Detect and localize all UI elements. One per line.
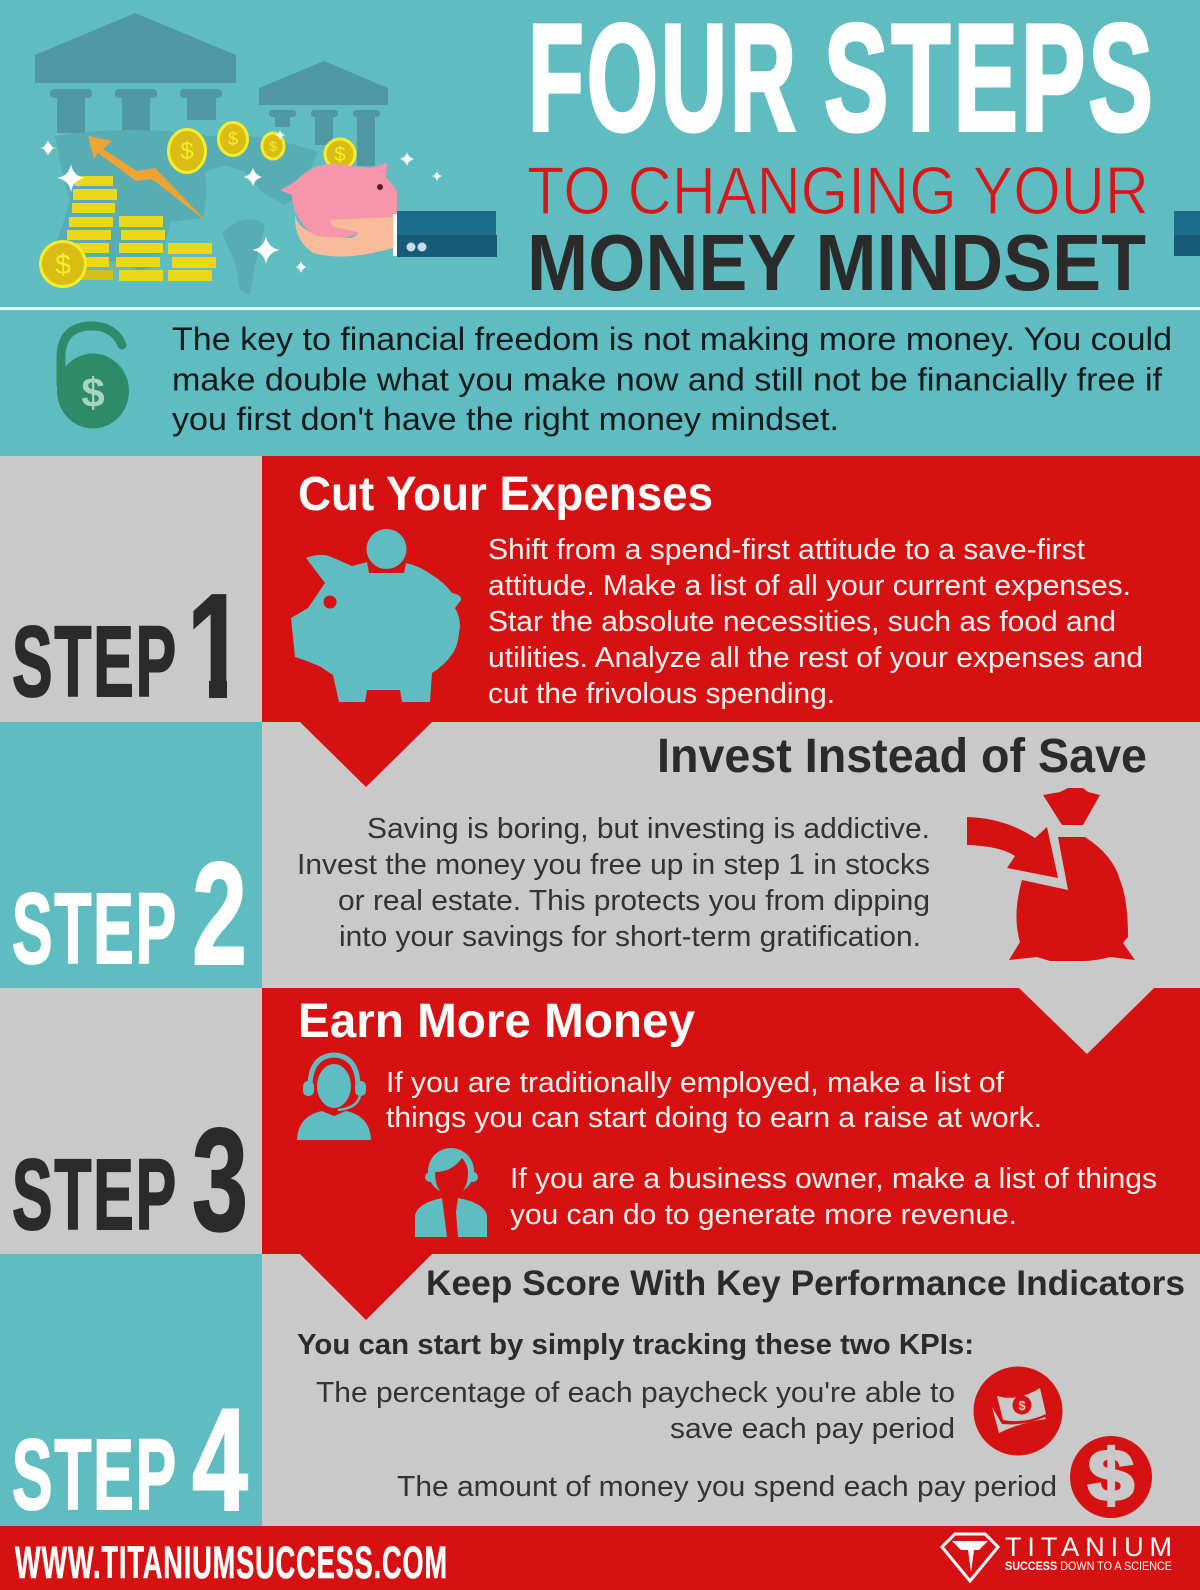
- step 4 label: [12, 1378, 248, 1541]
- icon: coins: [40, 122, 355, 286]
- step 3 text: business owner: [510, 1163, 1157, 1231]
- logo wordmark: TITANIUM: [1005, 1532, 1172, 1562]
- icon: pink piggy bank: [280, 163, 397, 238]
- panel: intro: [57, 321, 1172, 437]
- step 3 label: STEP: [12, 1139, 178, 1251]
- step 2 label: STEP: [12, 873, 178, 985]
- kpi 1 text: [316, 1377, 955, 1445]
- panel: step 1: [0, 456, 1200, 729]
- step 3 heading: Earn More Money: [298, 995, 695, 1048]
- divider line: [0, 307, 1200, 310]
- intro text: you first don't have the right money mindset.: [172, 401, 839, 437]
- step 2 label: 2: [192, 832, 247, 995]
- icon: piggy bank: [291, 529, 461, 702]
- sparkles: [39, 130, 442, 273]
- title line: money mindset: MONEY MINDSET: [527, 218, 1146, 307]
- icon: sleeve: [397, 211, 497, 257]
- step 2 body text: [297, 813, 930, 953]
- step 4 heading: Keep Score With Key Performance Indicators: [426, 1264, 1185, 1303]
- step 1 label: 1: [187, 564, 245, 729]
- step 1 heading: Cut Your Expenses: [298, 468, 713, 521]
- icon: open lock with dollar: $: [81, 369, 105, 416]
- step 1 body text: [488, 534, 1143, 710]
- coin symbols: $: [55, 249, 71, 280]
- panel: footer: [0, 1526, 1200, 1590]
- step 4 label: STEP: [12, 1419, 178, 1531]
- logo wordmark: SUCCESS DOWN TO A SCIENCE: [1005, 1561, 1172, 1573]
- step 1 body text: Star the absolute necessities, such as food and: [488, 606, 1116, 638]
- step 1 body text: cut the frivolous spending.: [488, 678, 835, 710]
- piggy eye: [377, 184, 383, 190]
- title line: to changing your: TO CHANGING YOUR: [527, 153, 1149, 229]
- coin symbols: $: [269, 138, 277, 154]
- icon: banknote circle: [974, 1366, 1062, 1456]
- step 3 text: employed: things you can start doing to earn a raise at work.: [386, 1102, 1042, 1134]
- kpi 2 text: The amount of money you spend each pay period: [397, 1471, 1057, 1503]
- title: [527, 0, 1156, 307]
- coin symbols: $: [334, 144, 346, 166]
- panel: step 4: [0, 1254, 1200, 1541]
- step 3 text: employed: If you are traditionally employed, make a list of: [386, 1067, 1005, 1099]
- step 1 label: [12, 564, 257, 729]
- world map: [40, 130, 318, 295]
- intro text: make double what you make now and still not be financially free if: [172, 362, 1162, 398]
- arrow: step 1 to step 2: [300, 722, 432, 787]
- icon: banknote circle: $: [1018, 1398, 1026, 1413]
- icon: shirt cuff: [393, 214, 397, 256]
- step 3 label: 3: [192, 1098, 248, 1261]
- step 2 body text: Saving is boring, but investing is addictive.: [367, 813, 930, 845]
- step 3 label: [12, 1098, 248, 1261]
- icon: dollar circle: $: [1088, 1436, 1134, 1516]
- step 3 text: business owner: you can do to generate more revenue.: [510, 1199, 1017, 1231]
- panel: header illustration: [35, 13, 497, 295]
- step 2 heading: Invest Instead of Save: [657, 730, 1147, 783]
- coin symbols: $: [228, 129, 238, 149]
- icon: headset person: [297, 1055, 371, 1140]
- step 4 label: 4: [192, 1378, 248, 1541]
- icon: business person: [415, 1148, 487, 1237]
- step 2 body text: into your savings for short-term gratification.: [339, 921, 921, 953]
- icon: bank large: [35, 13, 236, 137]
- step 2 label: [12, 832, 247, 995]
- step 3 text: employed: [386, 1067, 1042, 1134]
- arrow: step 2 to step 3: [1019, 988, 1154, 1054]
- icon: bank small: [259, 61, 388, 166]
- coin symbols: $: [180, 138, 194, 165]
- panel: step 2: [0, 722, 1200, 995]
- intro text: The key to financial freedom is not making more money. You could: [172, 321, 1172, 357]
- step 1 label: STEP: [12, 606, 178, 718]
- icon: titanium diamond logo: [942, 1534, 998, 1581]
- kpi 1 text: The percentage of each paycheck you're able to: [316, 1377, 955, 1409]
- icon: hand: [295, 215, 393, 257]
- step 2 body text: or real estate. This protects you from dipping: [338, 885, 930, 917]
- panel: step 3: [0, 988, 1200, 1261]
- icon: open lock with dollar: [57, 326, 129, 428]
- icon: money bag with arrow: [967, 788, 1135, 961]
- icon: dollar circle: [1070, 1436, 1152, 1518]
- step 2 body text: Invest the money you free up in step 1 in stocks: [297, 849, 930, 881]
- step 1 body text: attitude. Make a list of all your current expenses.: [488, 570, 1131, 602]
- website url: WWW.TITANIUMSUCCESS.COM: [15, 1537, 448, 1588]
- icon: growth arrow: [88, 136, 207, 222]
- intro text: [172, 321, 1172, 437]
- step 1 body text: utilities. Analyze all the rest of your expenses and: [488, 642, 1143, 674]
- coin symbols: [55, 129, 346, 280]
- step 3 text: business owner: If you are a business owner, make a list of things: [510, 1163, 1157, 1195]
- step 1 body text: Shift from a spend-first attitude to a save-first: [488, 534, 1085, 566]
- icon: sleeve sliver at right edge: [1174, 211, 1200, 256]
- arrow: step 3 to step 4: [300, 1254, 432, 1320]
- icon: gold bars: [67, 176, 216, 281]
- step 4 intro line: You can start by simply tracking these two KPIs:: [297, 1329, 974, 1361]
- kpi 1 text: save each pay period: [670, 1413, 955, 1445]
